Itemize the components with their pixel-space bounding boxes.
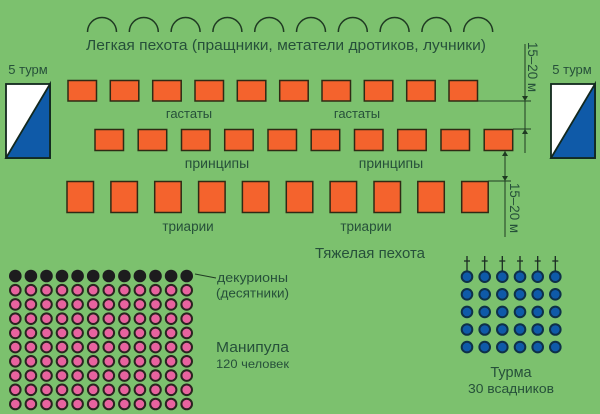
right cavalry label: 5 турм	[552, 62, 592, 77]
distance marker upper: 15–20 м	[525, 42, 540, 92]
maniple count: 120 человек	[216, 357, 290, 371]
distance marker lower: 15–20 м	[507, 183, 522, 233]
left cavalry label: 5 турм	[8, 62, 48, 77]
hastati row	[68, 80, 478, 101]
principes row	[95, 130, 513, 150]
heavy infantry heading: Тяжелая пехота	[315, 246, 426, 262]
triarii label right: триарии	[340, 219, 392, 234]
turma riders grid	[462, 271, 561, 352]
turma count: 30 всадников	[468, 382, 554, 396]
light infantry heading: Легкая пехота (пращники, метатели дротиков, лучники)	[86, 38, 486, 54]
decurions label: декурионы	[217, 271, 288, 285]
triarii label left: триарии	[162, 219, 214, 234]
right cavalry flag	[551, 84, 595, 158]
distance marker upper	[478, 42, 540, 153]
distance marker lower	[488, 151, 522, 237]
turma lances	[464, 256, 558, 271]
left cavalry flag	[6, 84, 50, 158]
triarii row	[67, 182, 488, 212]
hastati label right: гастаты	[334, 106, 380, 121]
decurions leader line	[195, 274, 216, 278]
light infantry arcs	[88, 17, 493, 32]
decurions label: (десятники)	[216, 286, 289, 300]
maniple soldiers grid	[10, 285, 192, 409]
hastati label left: гастаты	[166, 106, 212, 121]
maniple decurions row	[9, 270, 193, 282]
principes label right: принципы	[359, 155, 423, 171]
principes label left: принципы	[185, 155, 249, 171]
maniple title: Манипула	[216, 340, 290, 356]
turma title: Турма	[490, 365, 533, 381]
